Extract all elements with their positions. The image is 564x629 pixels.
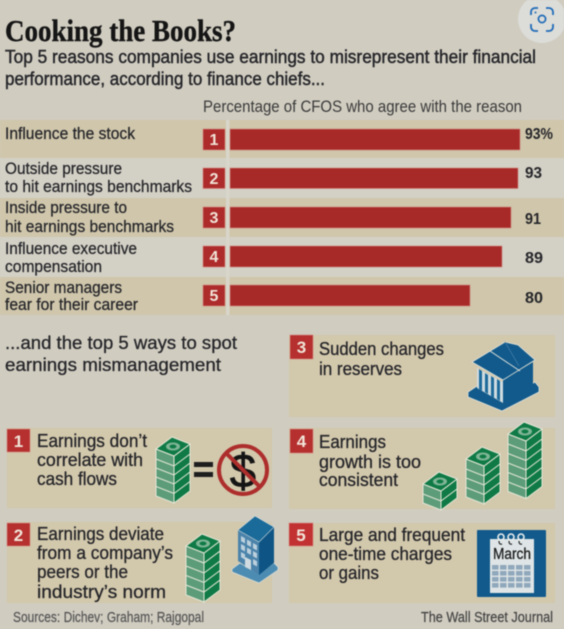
section heading: ways to spot: earnings mismanagement [5, 354, 221, 375]
bar chart: reasons [0, 120, 564, 315]
row 5: 5 [210, 288, 219, 305]
title: Cooking the Books? [5, 13, 236, 48]
row 2 [5, 160, 542, 196]
section heading: ways to spot [5, 332, 237, 375]
row 3 [5, 199, 541, 236]
panel 3: sudden changes in reserves [289, 335, 555, 417]
row 4: compensation [5, 258, 102, 276]
icon: bank [468, 342, 539, 411]
panel 3: sudden changes in reserves: in reserves [319, 358, 402, 379]
panel 4: growth too consistent: growth is too [319, 451, 421, 472]
subtitle: Top 5 reasons companies use earnings to misrepresent their financial [5, 46, 536, 67]
panel 4: growth too consistent: 4 [297, 432, 307, 451]
icon: money stack [186, 534, 220, 602]
panel 2: earnings deviate: industry’s norm [37, 581, 166, 602]
row 3: hit earnings benchmarks [5, 218, 174, 236]
row 2: 2 [210, 171, 219, 188]
row 5: Senior managers [5, 279, 122, 297]
panel 1: earnings don't correlate: cash flows [37, 468, 117, 489]
row 4: 89 [525, 250, 543, 267]
panel 4: growth too consistent [289, 422, 555, 510]
subtitle: performance, according to finance chiefs... [5, 68, 325, 89]
row 4: Influence executive [5, 240, 137, 258]
icon: no dollar sign: $ [230, 444, 256, 497]
icon: camera search button [518, 0, 564, 43]
icon: equals sign [194, 462, 213, 477]
icon: no dollar sign [219, 444, 267, 497]
row 4: 4 [210, 249, 219, 266]
row 1: Influence the stock [5, 125, 136, 143]
row 2: Outside pressure [5, 160, 122, 178]
panel 5: one-time charges: one-time charges [319, 543, 452, 564]
row 3: Inside pressure to [5, 199, 127, 217]
row 2: 93 [525, 165, 542, 182]
icon: office building [232, 516, 278, 583]
icon: medium money stack [466, 447, 500, 504]
panel 3: sudden changes in reserves: 3 [297, 338, 306, 357]
row 3: 3 [210, 210, 219, 227]
icon: calendar [477, 530, 546, 597]
row 3: 91 [525, 211, 541, 228]
row 4 [5, 240, 543, 276]
panel 1: earnings don't correlate: 1 [14, 432, 23, 451]
panel 5: one-time charges [289, 523, 555, 603]
row 5: 80 [525, 290, 543, 307]
icon: calendar: March [493, 546, 531, 563]
icon: money stack [156, 437, 190, 503]
panel 5: one-time charges: or gains [319, 562, 379, 583]
panel 2: earnings deviate: peers or the [37, 561, 128, 582]
panel 1: earnings don't correlate: correlate with [37, 449, 143, 470]
row 1: 93% [525, 126, 553, 143]
row 5 [5, 279, 543, 314]
subtitle [5, 46, 536, 89]
row 1: 1 [210, 132, 219, 149]
panel 2: earnings deviate: Earnings deviate [37, 523, 164, 544]
panel 2: earnings deviate [7, 516, 278, 603]
chart heading: Percentage of CFOS who agree with the reason [203, 97, 522, 116]
row 1 [5, 125, 553, 150]
panel 5: one-time charges: Large and frequent [319, 524, 465, 545]
row 5: fear for their career [5, 296, 138, 314]
panel 2: earnings deviate: from a company’s [37, 542, 173, 563]
panel 1: earnings don't correlate [7, 428, 272, 508]
icon: large money stack [508, 422, 542, 498]
panel 3: sudden changes in reserves: Sudden changes [319, 338, 444, 359]
icon: small money stack [423, 472, 457, 510]
panel 2: earnings deviate: 2 [14, 526, 23, 545]
row 2: to hit earnings benchmarks [5, 178, 192, 196]
panel 4: growth too consistent: consistent [319, 469, 398, 490]
panel 4: growth too consistent: Earnings [319, 431, 386, 452]
section heading: ways to spot: ...and the top 5 ways to spot [5, 332, 237, 353]
panel 1: earnings don't correlate: Earnings don’t [37, 430, 147, 451]
panel 5: one-time charges: 5 [296, 526, 306, 545]
source note: Sources: Dichev; Graham; Rajgopal [13, 610, 204, 626]
